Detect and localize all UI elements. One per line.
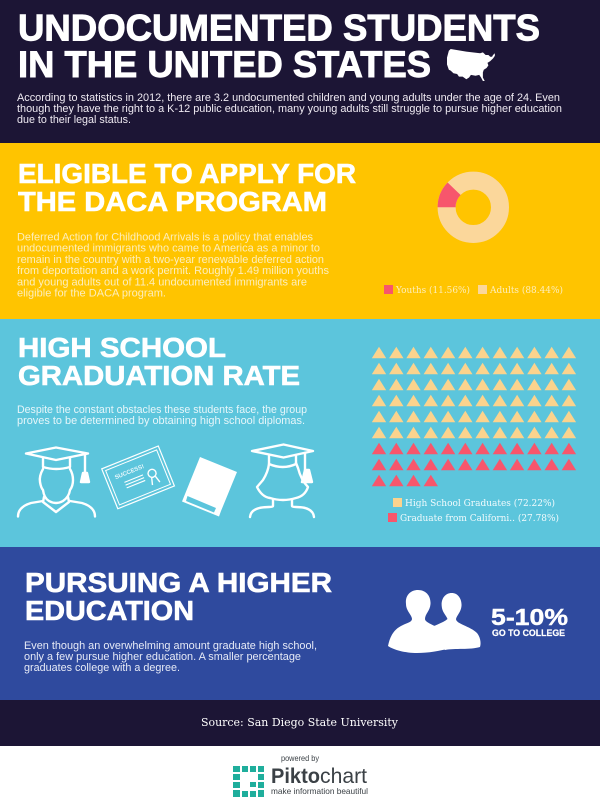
panel: DACA eligibility [0,143,600,319]
higher education body text: Even though an overwhelming amount graduate high school, [24,640,317,652]
heading: graduation: HIGH SCHOOL [18,332,226,363]
graduation body text: Despite the constant obstacles these students face, the group [17,404,307,416]
footer: Piktochart branding [233,754,368,797]
icon: Piktochart logo [233,766,264,797]
heading: graduation: GRADUATION RATE [18,360,300,391]
icon: map of the United States [447,49,495,81]
intro text: though they have the right to a K-12 public education, many young adults still struggle to pursue higher education [17,103,562,115]
wordmark: chart [320,765,367,788]
heading: DACA: THE DACA PROGRAM [18,186,327,217]
panel: high school graduation [0,319,600,547]
heading: higher education [25,567,332,626]
wordmark: make information beautiful [271,786,368,796]
icon: male graduate [18,448,95,516]
donut legend: Youths (11.56%) [395,285,470,296]
intro text: According to statistics in 2012, there are 3.2 undocumented children and young adults under the age of 24. Even [17,92,560,104]
icon: female graduate [250,444,314,517]
DACA body text: from deportation and a work permit. Roughly 1.49 million youths [17,265,329,277]
wordmark [271,765,368,796]
tan triangles: graduates [372,347,576,438]
heading: DACA: ELIGIBLE TO APPLY FOR [18,158,356,189]
title: IN THE UNITED STATES [18,44,431,85]
stat: 5-10% go to college: GO TO COLLEGE [492,628,565,639]
stat: 5-10% go to college: 5-10% [491,604,568,630]
higher education body text: only a few pursue higher education. A smaller percentage [24,651,301,663]
donut legend: Adults (88.44%) [489,285,563,296]
heading: DACA [18,158,356,217]
intro text: due to their legal status. [17,114,131,126]
source text: Source: San Diego State University [201,715,398,729]
DACA body text: eligible for the DACA program. [17,288,166,300]
graduation body text: proves to be determined by obtaining high school diplomas. [17,415,305,427]
title: UNDOCUMENTED STUDENTS [18,8,540,48]
heading: graduation [18,332,300,391]
title [18,8,540,85]
DACA body text: and young adults out of 11.4 undocumented immigrants are [17,276,307,288]
DACA body text: Deferred Action for Childhood Arrivals is a policy that enables [17,232,313,244]
red triangles: California graduates [372,443,576,486]
donut chart [438,181,500,234]
stat: 5-10% go to college [491,604,568,639]
icon: diploma: SUCCESS! [114,464,145,481]
heading: higher education: PURSUING A HIGHER [25,567,332,598]
icon: two people [388,590,481,653]
higher education body text [24,640,317,674]
intro text [17,92,562,126]
higher education body text: graduates college with a degree. [24,662,180,674]
DACA body text: remain in the country with a two-year renewable deferred action [17,254,324,266]
pictogram legend: High School Graduates (72.22%) [405,498,555,509]
pictogram legend [388,498,559,524]
graduation body text [17,404,307,427]
panel: higher education [0,547,600,700]
pictogram chart: triangles [372,347,576,486]
donut legend [384,285,563,296]
panel: introduction [0,0,600,143]
powered by: powered by [281,754,319,763]
DACA body text: undocumented immigrants who came to America as a minor to [17,242,320,254]
panel: source [0,700,600,746]
pictogram legend: Graduate from Californi.. (27.78%) [400,513,559,524]
wordmark: Pikto [271,765,320,788]
icon: diploma [102,446,174,509]
heading: higher education: EDUCATION [25,595,194,626]
icon: book [182,457,237,516]
DACA body text [17,232,329,300]
